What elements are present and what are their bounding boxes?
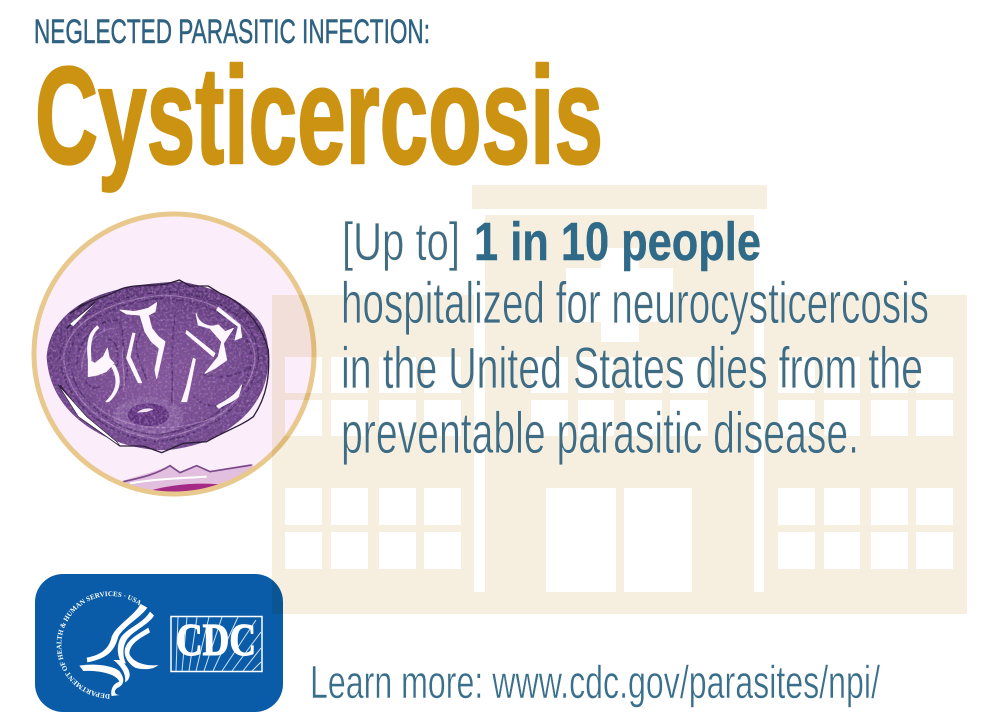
statistic text block <box>341 212 929 466</box>
HHS seal ring text <box>61 596 149 694</box>
statistic text block: [Up to] <box>342 212 460 272</box>
title: Cysticercosis <box>35 39 603 193</box>
tissue strip at bottom of photo <box>122 464 254 492</box>
windows <box>285 357 953 592</box>
hospital building background <box>272 185 967 614</box>
icon: HHS eagle <box>79 604 158 696</box>
statistic text block: 1 in 10 people <box>474 212 761 272</box>
photo: cysticercus micrograph in circle <box>34 214 314 497</box>
cyst body <box>43 278 277 455</box>
white cavities <box>88 303 242 408</box>
medical cross <box>566 248 673 342</box>
logo: HHS and CDC badge <box>35 574 283 712</box>
dark wavy outer wall <box>60 280 269 453</box>
eyebrow heading: NEGLECTED PARASITIC INFECTION: <box>34 13 430 51</box>
icon: CDC mark: CDC <box>176 614 256 665</box>
logo: HHS and CDC badge: DEPARTMENT OF HEALTH & HUMAN SERVICES · USA <box>56 591 140 699</box>
